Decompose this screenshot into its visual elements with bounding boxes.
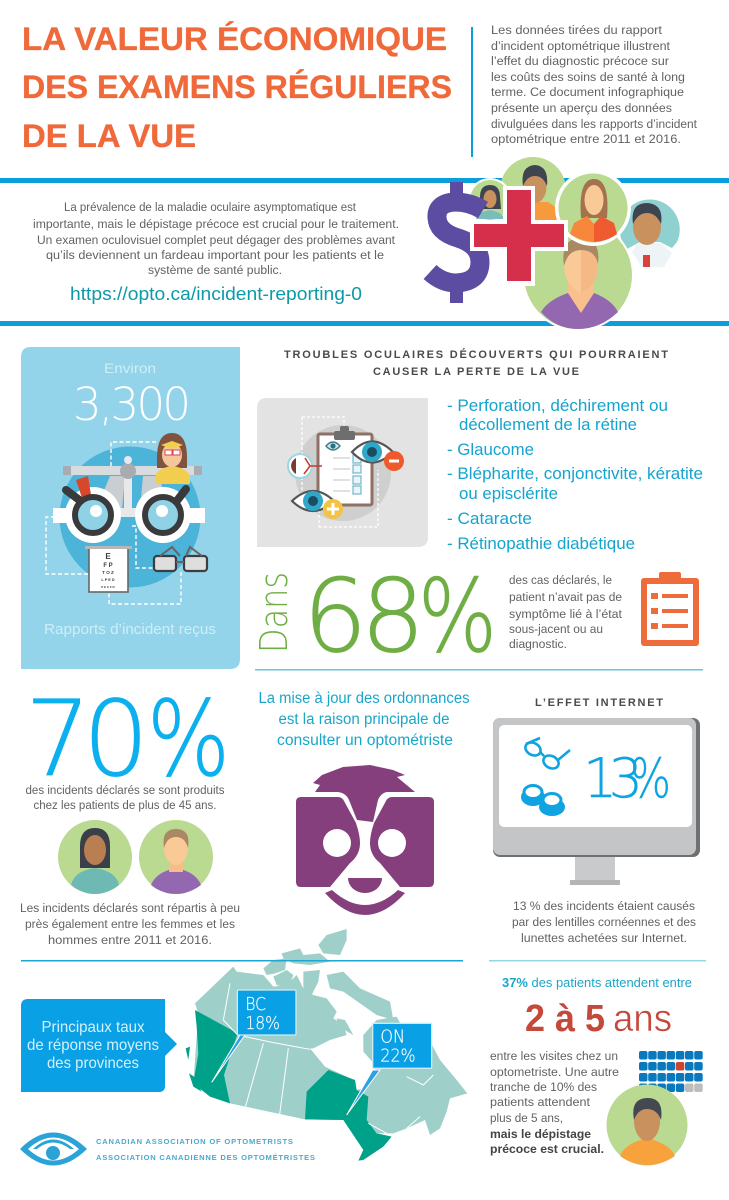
woman orange bbox=[555, 170, 631, 246]
intro text top right: présente un aperçu des données bbox=[491, 101, 672, 115]
icon: man in orange bbox=[606, 1084, 688, 1166]
text: visits: mais le dépistage bbox=[490, 1127, 591, 1141]
text: symptom: diagnostic. bbox=[509, 637, 567, 651]
intro text top right bbox=[491, 23, 698, 146]
text: visits: patients attendent bbox=[490, 1095, 591, 1109]
prevalence text: Un examen oculovisuel complet peut dégager des problèmes avant bbox=[37, 233, 396, 247]
eye chart bbox=[85, 546, 132, 592]
prevalence text bbox=[33, 200, 399, 277]
text: symptom bbox=[509, 573, 623, 651]
intro text top right: d’incident optométrique illustrent bbox=[491, 39, 671, 53]
text: prescription update bbox=[258, 690, 470, 749]
intro text top right: divulguées dans les rapports d’incident bbox=[491, 117, 698, 131]
stat: 37% waiting bbox=[502, 975, 692, 1040]
woman small bbox=[468, 178, 512, 222]
stat: 68%: % bbox=[418, 557, 497, 675]
icon: eye with minus bbox=[352, 442, 404, 471]
text: visits: tranche de 10% des bbox=[490, 1080, 597, 1094]
monitor bbox=[493, 718, 700, 885]
text: prescription update: est la raison principale de bbox=[278, 711, 450, 728]
panel: clipboard illustration bbox=[257, 398, 428, 547]
icon: contact lens case bbox=[521, 786, 565, 816]
large man bbox=[522, 219, 634, 331]
text: over 45 bbox=[26, 783, 224, 812]
text: gender split: hommes entre 2011 et 2016. bbox=[48, 933, 212, 947]
text: gender split: près également entre les femmes et les bbox=[25, 917, 235, 931]
illustration: health cost and people bbox=[430, 157, 680, 331]
arctic islands bbox=[263, 929, 393, 1035]
stat: 37% waiting: ans bbox=[613, 998, 672, 1040]
provinces light bbox=[193, 967, 467, 1135]
eye chart: P E C F D bbox=[101, 585, 116, 589]
text: symptom: sous-jacent ou au bbox=[509, 622, 603, 636]
icon: eye with plus bbox=[292, 491, 343, 519]
prevalence text: qu’ils deviennent un fardeau important pour les patients et le bbox=[46, 248, 384, 262]
text: symptom: symptôme lié à l’état bbox=[509, 607, 623, 621]
panel: 3,300 reports bbox=[21, 347, 240, 669]
list of conditions: - Blépharite, conjonctivite, kératite bbox=[447, 465, 703, 483]
stat: 70% bbox=[25, 678, 230, 800]
heading: eye conditions bbox=[284, 348, 668, 378]
monitor: % bbox=[630, 747, 671, 810]
callout: ON bbox=[347, 1023, 432, 1115]
callout: BC bbox=[212, 990, 296, 1082]
callout: ON: ON bbox=[380, 1027, 405, 1048]
icon: woman bbox=[58, 820, 132, 894]
text: symptom: patient n’avait pas de bbox=[509, 590, 622, 604]
intro text top right: Les données tirées du rapport bbox=[491, 23, 663, 37]
stat: 37% waiting: 2 à 5 bbox=[525, 998, 605, 1040]
logo: association: CANADIAN ASSOCIATION OF OPTOMETRISTS bbox=[96, 1137, 293, 1146]
logo: association bbox=[20, 1132, 315, 1166]
link: https://opto.ca/incident-reporting-0 bbox=[70, 284, 362, 304]
text: internet incidents: 13 % des incidents étaient causés bbox=[513, 899, 695, 913]
list of conditions: - Perforation, déchirement ou bbox=[447, 397, 668, 415]
text: prescription update: La mise à jour des ordonnances bbox=[258, 690, 470, 707]
logo: association: ASSOCIATION CANADIENNE DES OPTOMÉTRISTES bbox=[96, 1153, 315, 1162]
callout: provinces: de réponse moyens bbox=[27, 1037, 159, 1054]
eye chart: F P bbox=[103, 563, 113, 569]
text: over 45: des incidents déclarés se sont produits bbox=[26, 783, 224, 797]
panel: 3,300 reports: Environ bbox=[104, 360, 156, 376]
dollar sign bbox=[430, 182, 483, 303]
callout: ON: 22% bbox=[380, 1046, 416, 1067]
stat: 68%: 68 bbox=[303, 557, 425, 675]
text: gender split: Les incidents déclarés sont répartis à peu bbox=[20, 901, 240, 915]
stat: 37% waiting: 37% des patients attendent entre bbox=[502, 975, 692, 990]
plus sign bbox=[470, 186, 568, 286]
panel: 3,300 reports: Rapports d’incident reçus bbox=[44, 621, 216, 638]
stat: 70%: 70 bbox=[25, 678, 149, 800]
text: internet incidents: par des lentilles cornéennes et des bbox=[512, 915, 696, 929]
title bbox=[22, 20, 452, 154]
icon: orange clipboard bbox=[641, 572, 699, 646]
intro text top right: les coûts des soins de santé à long bbox=[491, 70, 685, 84]
icon: purple face bbox=[296, 765, 434, 915]
eye chart: L P E D bbox=[101, 578, 115, 582]
prevalence text: importante, mais le dépistage précoce est crucial pour le traitement. bbox=[33, 217, 399, 231]
text: prescription update: consulter un optométriste bbox=[277, 732, 453, 749]
stat: 68%: Dans bbox=[252, 572, 296, 653]
eye chart: T O Z bbox=[102, 570, 114, 575]
icon: man bbox=[139, 820, 213, 894]
dashed connectors bbox=[46, 442, 181, 604]
prevalence text: La prévalence de la maladie oculaire asymptomatique est bbox=[64, 200, 357, 214]
illustration: trial frame bbox=[53, 446, 205, 588]
text: internet incidents: lunettes achetées sur Internet. bbox=[521, 931, 687, 945]
list of conditions: - Glaucome bbox=[447, 441, 534, 459]
title: DES EXAMENS RÉGULIERS bbox=[22, 68, 452, 105]
text: symptom: des cas déclarés, le bbox=[509, 573, 612, 587]
woman with glasses bbox=[155, 433, 190, 484]
list of conditions: décollement de la rétine bbox=[459, 416, 637, 434]
callout: provinces: Principaux taux bbox=[42, 1019, 144, 1036]
icon: glasses bbox=[523, 738, 570, 771]
title: DE LA VUE bbox=[22, 118, 196, 154]
stat: 68% bbox=[252, 557, 497, 675]
map of Canada bbox=[186, 929, 467, 1161]
text: gender split bbox=[20, 901, 240, 947]
man top bbox=[500, 157, 566, 223]
callout: provinces: des provinces bbox=[47, 1055, 139, 1072]
text: visits bbox=[490, 1049, 619, 1156]
text: visits: précoce est crucial. bbox=[490, 1142, 604, 1156]
glasses bbox=[154, 547, 207, 571]
monitor: 13 bbox=[583, 747, 643, 810]
stat: 70%: % bbox=[147, 678, 230, 800]
intro text top right: optométrique entre 2011 et 2016. bbox=[491, 132, 681, 146]
prevalence text: système de santé public. bbox=[148, 263, 282, 277]
text: internet incidents bbox=[512, 899, 696, 945]
callout: BC: BC bbox=[245, 994, 266, 1015]
callout: BC: 18% bbox=[245, 1013, 280, 1034]
icon: eyeball bbox=[288, 454, 322, 478]
intro text top right: terme. Ce document infographique bbox=[491, 85, 684, 99]
text: visits: optometriste. Une autre bbox=[490, 1065, 619, 1079]
list of conditions bbox=[447, 397, 703, 553]
intro text top right: l’effet du diagnostic précoce sur bbox=[491, 54, 669, 68]
title: LA VALEUR ÉCONOMIQUE bbox=[22, 20, 447, 57]
heading: internet effect: L’EFFET INTERNET bbox=[535, 697, 663, 709]
list of conditions: - Cataracte bbox=[447, 510, 532, 528]
boundaries bbox=[223, 983, 433, 1133]
Ontario bbox=[305, 1070, 392, 1161]
text: visits: plus de 5 ans, bbox=[490, 1111, 563, 1125]
text: visits: entre les visites chez un bbox=[490, 1049, 618, 1063]
heading: eye conditions: TROUBLES OCULAIRES DÉCOUVERTS QUI POURRAIENT bbox=[284, 348, 668, 361]
icon: waffle chart bbox=[639, 1051, 703, 1092]
text: over 45: chez les patients de plus de 45 ans. bbox=[34, 798, 216, 812]
doctor bbox=[620, 199, 680, 267]
callout: provinces bbox=[21, 999, 177, 1092]
heading: eye conditions: CAUSER LA PERTE DE LA VUE bbox=[373, 366, 579, 378]
list of conditions: - Rétinopathie diabétique bbox=[447, 535, 635, 553]
BC bbox=[193, 1010, 238, 1103]
eye chart: E bbox=[105, 552, 111, 561]
list of conditions: ou episclérite bbox=[459, 485, 558, 503]
big number: 3,300 bbox=[73, 378, 191, 431]
